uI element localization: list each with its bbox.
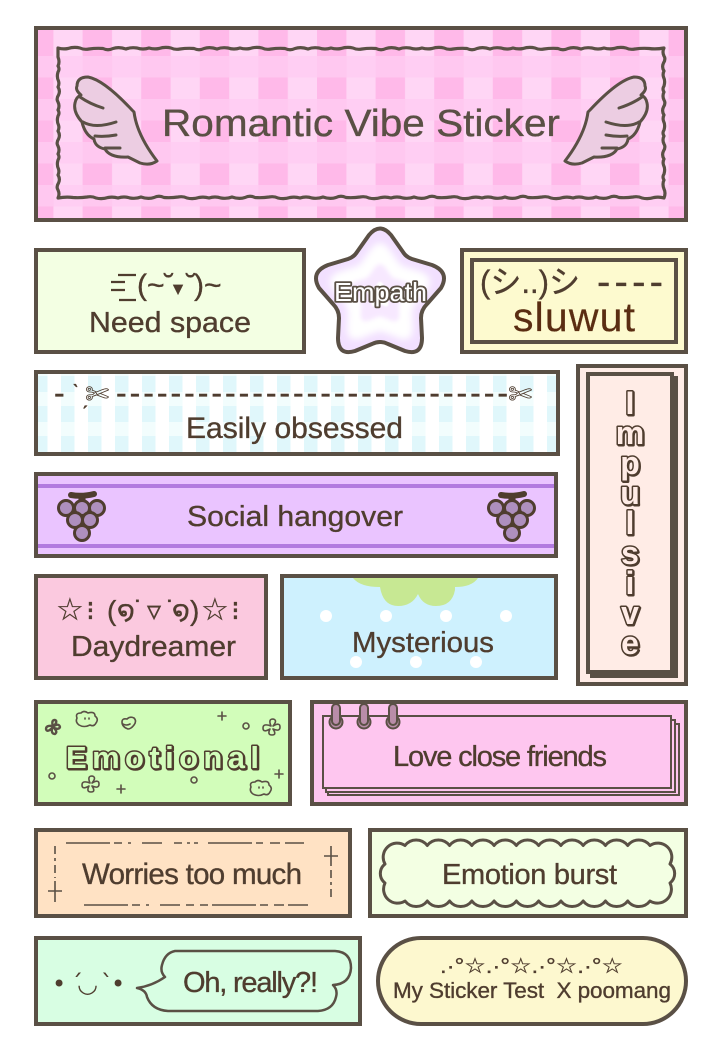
panel: emotional: [36, 702, 290, 804]
panel: empath star: [316, 228, 444, 352]
panel: mysterious: [282, 576, 556, 678]
inner frame with shadow: [588, 374, 678, 678]
panel: my sticker test pill: [378, 938, 686, 1024]
label: impulsive vertical: p: [620, 445, 640, 481]
panel: daydreamer: [36, 576, 266, 678]
cut line: -: [54, 375, 65, 411]
label: oh really: Oh, really?!: [183, 967, 318, 999]
panel: need space: [36, 250, 304, 352]
label: impulsive vertical: i: [626, 565, 634, 601]
kaomoji: smiling face: •´◡`•: [52, 970, 125, 998]
label: sluwut: sluwut: [513, 294, 636, 340]
label: impulsive vertical: s: [621, 535, 639, 571]
white dots: [320, 610, 512, 668]
dash-dot frame: [48, 843, 338, 905]
label: worries too much: Worries too much: [82, 858, 302, 891]
label: impulsive vertical: I: [626, 385, 634, 421]
panel: sluwut: [462, 250, 686, 352]
icon: right grapes: [488, 494, 534, 540]
kaomoji: sparkle face: ☆: [201, 592, 229, 628]
icon: right wing: [565, 77, 647, 164]
kaomoji: running away: [480, 260, 663, 304]
wobbly frame: [57, 47, 665, 199]
label: emotion burst: Emotion burst: [442, 859, 617, 891]
panel: easily obsessed: [36, 372, 558, 454]
cut line: ˋ: [72, 380, 79, 405]
label: emotional: Emotional: [66, 740, 259, 775]
kaomoji: sparkle face: ⁝: [86, 595, 95, 626]
label: credit: My Sticker Test X poomang: [393, 978, 671, 1003]
cut line: ✄: [85, 377, 109, 411]
kaomoji: sparkle face: ⁝: [231, 595, 240, 626]
notebook rings: [330, 704, 400, 728]
label: empath: Empath: [334, 277, 427, 307]
panel: romantic vibe sticker title: [36, 28, 686, 220]
panel: emotion burst: [370, 830, 686, 916]
green cloud: [353, 578, 478, 606]
speech bubble: [137, 951, 351, 1011]
kaomoji: running away: (シ..)シ: [480, 264, 580, 300]
kaomoji: running away: ----: [597, 260, 663, 304]
panel: impulsive: [578, 366, 686, 684]
inner frame: [472, 260, 676, 342]
cut line: ✄: [508, 377, 532, 411]
purple stripes: [38, 486, 554, 546]
panel: oh really: [36, 938, 360, 1024]
doodles: [46, 712, 283, 796]
label: social hangover: Social hangover: [187, 501, 403, 533]
label: daydreamer: Daydreamer: [71, 631, 236, 663]
label: impulsive vertical: v: [621, 595, 639, 631]
kaomoji: running face: (~˘▾˘)~: [137, 269, 222, 302]
label: impulsive vertical: e: [621, 625, 639, 661]
scalloped frame: [380, 840, 675, 907]
notebook pages: [323, 716, 679, 795]
star inner glow: [330, 243, 430, 340]
label: mysterious: Mysterious: [352, 627, 494, 659]
label: impulsive vertical: m: [616, 415, 644, 451]
kaomoji: star trail: .·°☆.·°☆.·°☆.·°☆: [440, 955, 623, 978]
cut line: ˏ: [81, 384, 88, 409]
title: Romantic Vibe Sticker: [162, 103, 560, 145]
label: impulsive vertical: [616, 385, 644, 661]
cut line: -----------------------------: [116, 375, 508, 411]
panel: love close friends: [312, 702, 686, 804]
label: need space: Need space: [89, 307, 251, 339]
icon: left wing: [75, 77, 157, 164]
label: impulsive vertical: u: [620, 475, 640, 511]
label: easily obsessed: Easily obsessed: [186, 412, 403, 445]
label: love close friends: Love close friends: [393, 741, 607, 773]
panel: social hangover: [36, 474, 556, 556]
kaomoji: sparkle face: (໑˙▿˙໑): [107, 595, 199, 626]
kaomoji: sparkle face: ☆: [56, 592, 84, 628]
icon: left grapes: [58, 494, 104, 540]
label: impulsive vertical: l: [626, 505, 634, 541]
panel: worries too much: [36, 830, 350, 916]
